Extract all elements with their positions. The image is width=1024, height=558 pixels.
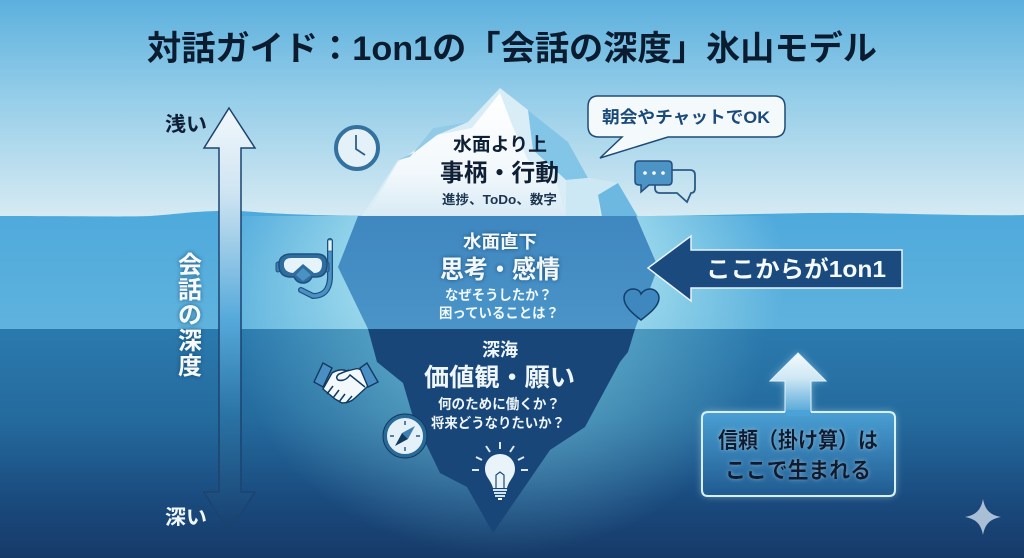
- text block: deep sea: 何のために働くか？: [438, 396, 560, 412]
- label: conversation depth vertical: 深: [178, 328, 202, 355]
- text block: deep sea: 将来どうなりたいか？: [431, 415, 565, 431]
- callout: speech bubble: [588, 96, 785, 158]
- icon: snorkel mask: [276, 240, 332, 296]
- icon: light bulb: [472, 442, 528, 499]
- background: glow around iceberg in shallow water: [215, 216, 785, 330]
- box: [702, 412, 895, 496]
- icon: handshake: [314, 363, 378, 403]
- box text: 信頼（掛け算）は: [718, 428, 878, 453]
- icon: chat bubbles: [635, 161, 695, 202]
- arrow: here starts 1on1: [648, 236, 902, 301]
- text block: above water: [440, 134, 559, 207]
- icon: clock: [336, 127, 378, 169]
- callout: speech bubble: 朝会やチャットでOK: [602, 108, 771, 127]
- text block: deep sea: [424, 340, 575, 431]
- background: shallow water: [0, 211, 1024, 330]
- label: conversation depth vertical: 話: [178, 277, 202, 304]
- background: glow around iceberg in deep water: [230, 329, 770, 558]
- text block: just below surface: 思考・感情: [440, 256, 560, 284]
- label: conversation depth vertical: 度: [178, 353, 202, 380]
- text block: deep sea: 深海: [482, 340, 518, 360]
- callout: trust arrow and box: ここで生まれる: [725, 458, 871, 483]
- text block: just below surface: なぜそうしたか？: [445, 287, 552, 303]
- iceberg: [338, 88, 658, 533]
- iceberg tip above water: [362, 88, 638, 217]
- label: shallow: 浅い: [165, 113, 207, 136]
- text block: above water: 事柄・行動: [440, 160, 559, 187]
- icon: sparkle watermark: [965, 499, 1001, 535]
- text block: just below surface: [439, 232, 560, 321]
- callout: trust arrow and box: [702, 353, 895, 496]
- arrow: conversation depth: [204, 108, 255, 532]
- background: deep water: [0, 329, 1024, 558]
- icon: heart: [624, 289, 659, 320]
- background: sky: [0, 0, 1024, 220]
- text block: above water: 進捗、ToDo、数字: [442, 192, 557, 207]
- arrow: here starts 1on1: ここからが1on1: [706, 256, 886, 282]
- arrow up: [770, 353, 826, 413]
- text block: deep sea: 価値観・願い: [424, 364, 575, 392]
- icon: compass: [383, 414, 427, 458]
- label: conversation depth vertical: 会: [178, 252, 202, 279]
- text block: just below surface: 水面直下: [463, 232, 537, 252]
- label: conversation depth vertical: の: [178, 302, 202, 329]
- title: 対話ガイド：1on1の「会話の深度」氷山モデル: [147, 29, 877, 68]
- label: deep: 深い: [165, 506, 207, 529]
- iceberg middle section: [338, 216, 658, 329]
- text block: above water: 水面より上: [453, 134, 547, 155]
- glow: [702, 412, 895, 496]
- iceberg deep section: [368, 329, 635, 533]
- text block: just below surface: 困っていることは？: [439, 305, 559, 321]
